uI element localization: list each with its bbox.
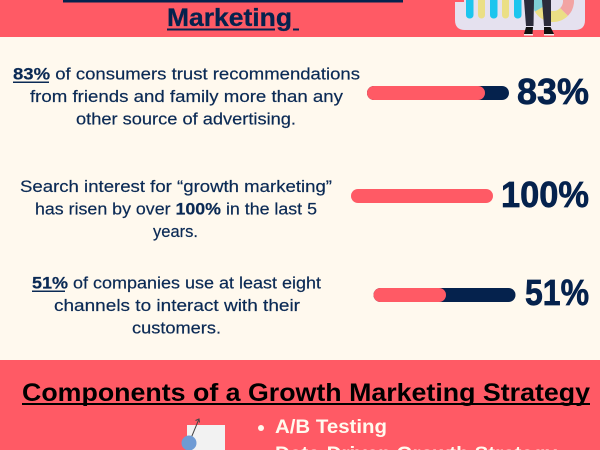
progress bar: 83 percent (367, 86, 509, 100)
stat text: 83 percent: 83% of consumers trust recommendations (13, 66, 360, 84)
stat text: 51 percent (32, 274, 321, 338)
stat text: 83 percent: other source of advertising. (76, 110, 296, 128)
stat text: 83 percent: from friends and family more than any (30, 88, 344, 106)
stat value: 51 percent: 51% (525, 272, 589, 313)
title: Marketing (167, 4, 292, 32)
stat value: 100 percent: 100% (501, 174, 589, 215)
stat text: 51 percent: channels to interact with their (54, 297, 301, 315)
stat text: 51 percent: customers. (132, 320, 221, 338)
stat text: 100 percent: years. (153, 223, 198, 241)
progress bar: 51 percent (374, 288, 516, 302)
panel: header (0, 0, 600, 37)
panel: statistics (0, 37, 600, 360)
icon: chart card (182, 419, 225, 450)
list: strategy components: A/B Testing (275, 417, 387, 438)
list: strategy components (258, 417, 557, 450)
stat text: 100 percent (20, 178, 332, 241)
icon: analytics dashboard with person (455, 0, 585, 36)
heading: components: Components of a Growth Marketing Strategy (22, 379, 590, 407)
stat text: 100 percent: has risen by over 100% in the last 5 (35, 200, 317, 218)
stat text: 83 percent (13, 66, 360, 128)
stat text: 51 percent: 51% of companies use at least eight (32, 274, 321, 292)
progress bar: 100 percent (351, 189, 493, 203)
stat value: 83 percent: 83% (517, 71, 589, 112)
stat text: 100 percent: Search interest for “growth marketing” (20, 178, 332, 196)
panel: components (0, 360, 600, 450)
